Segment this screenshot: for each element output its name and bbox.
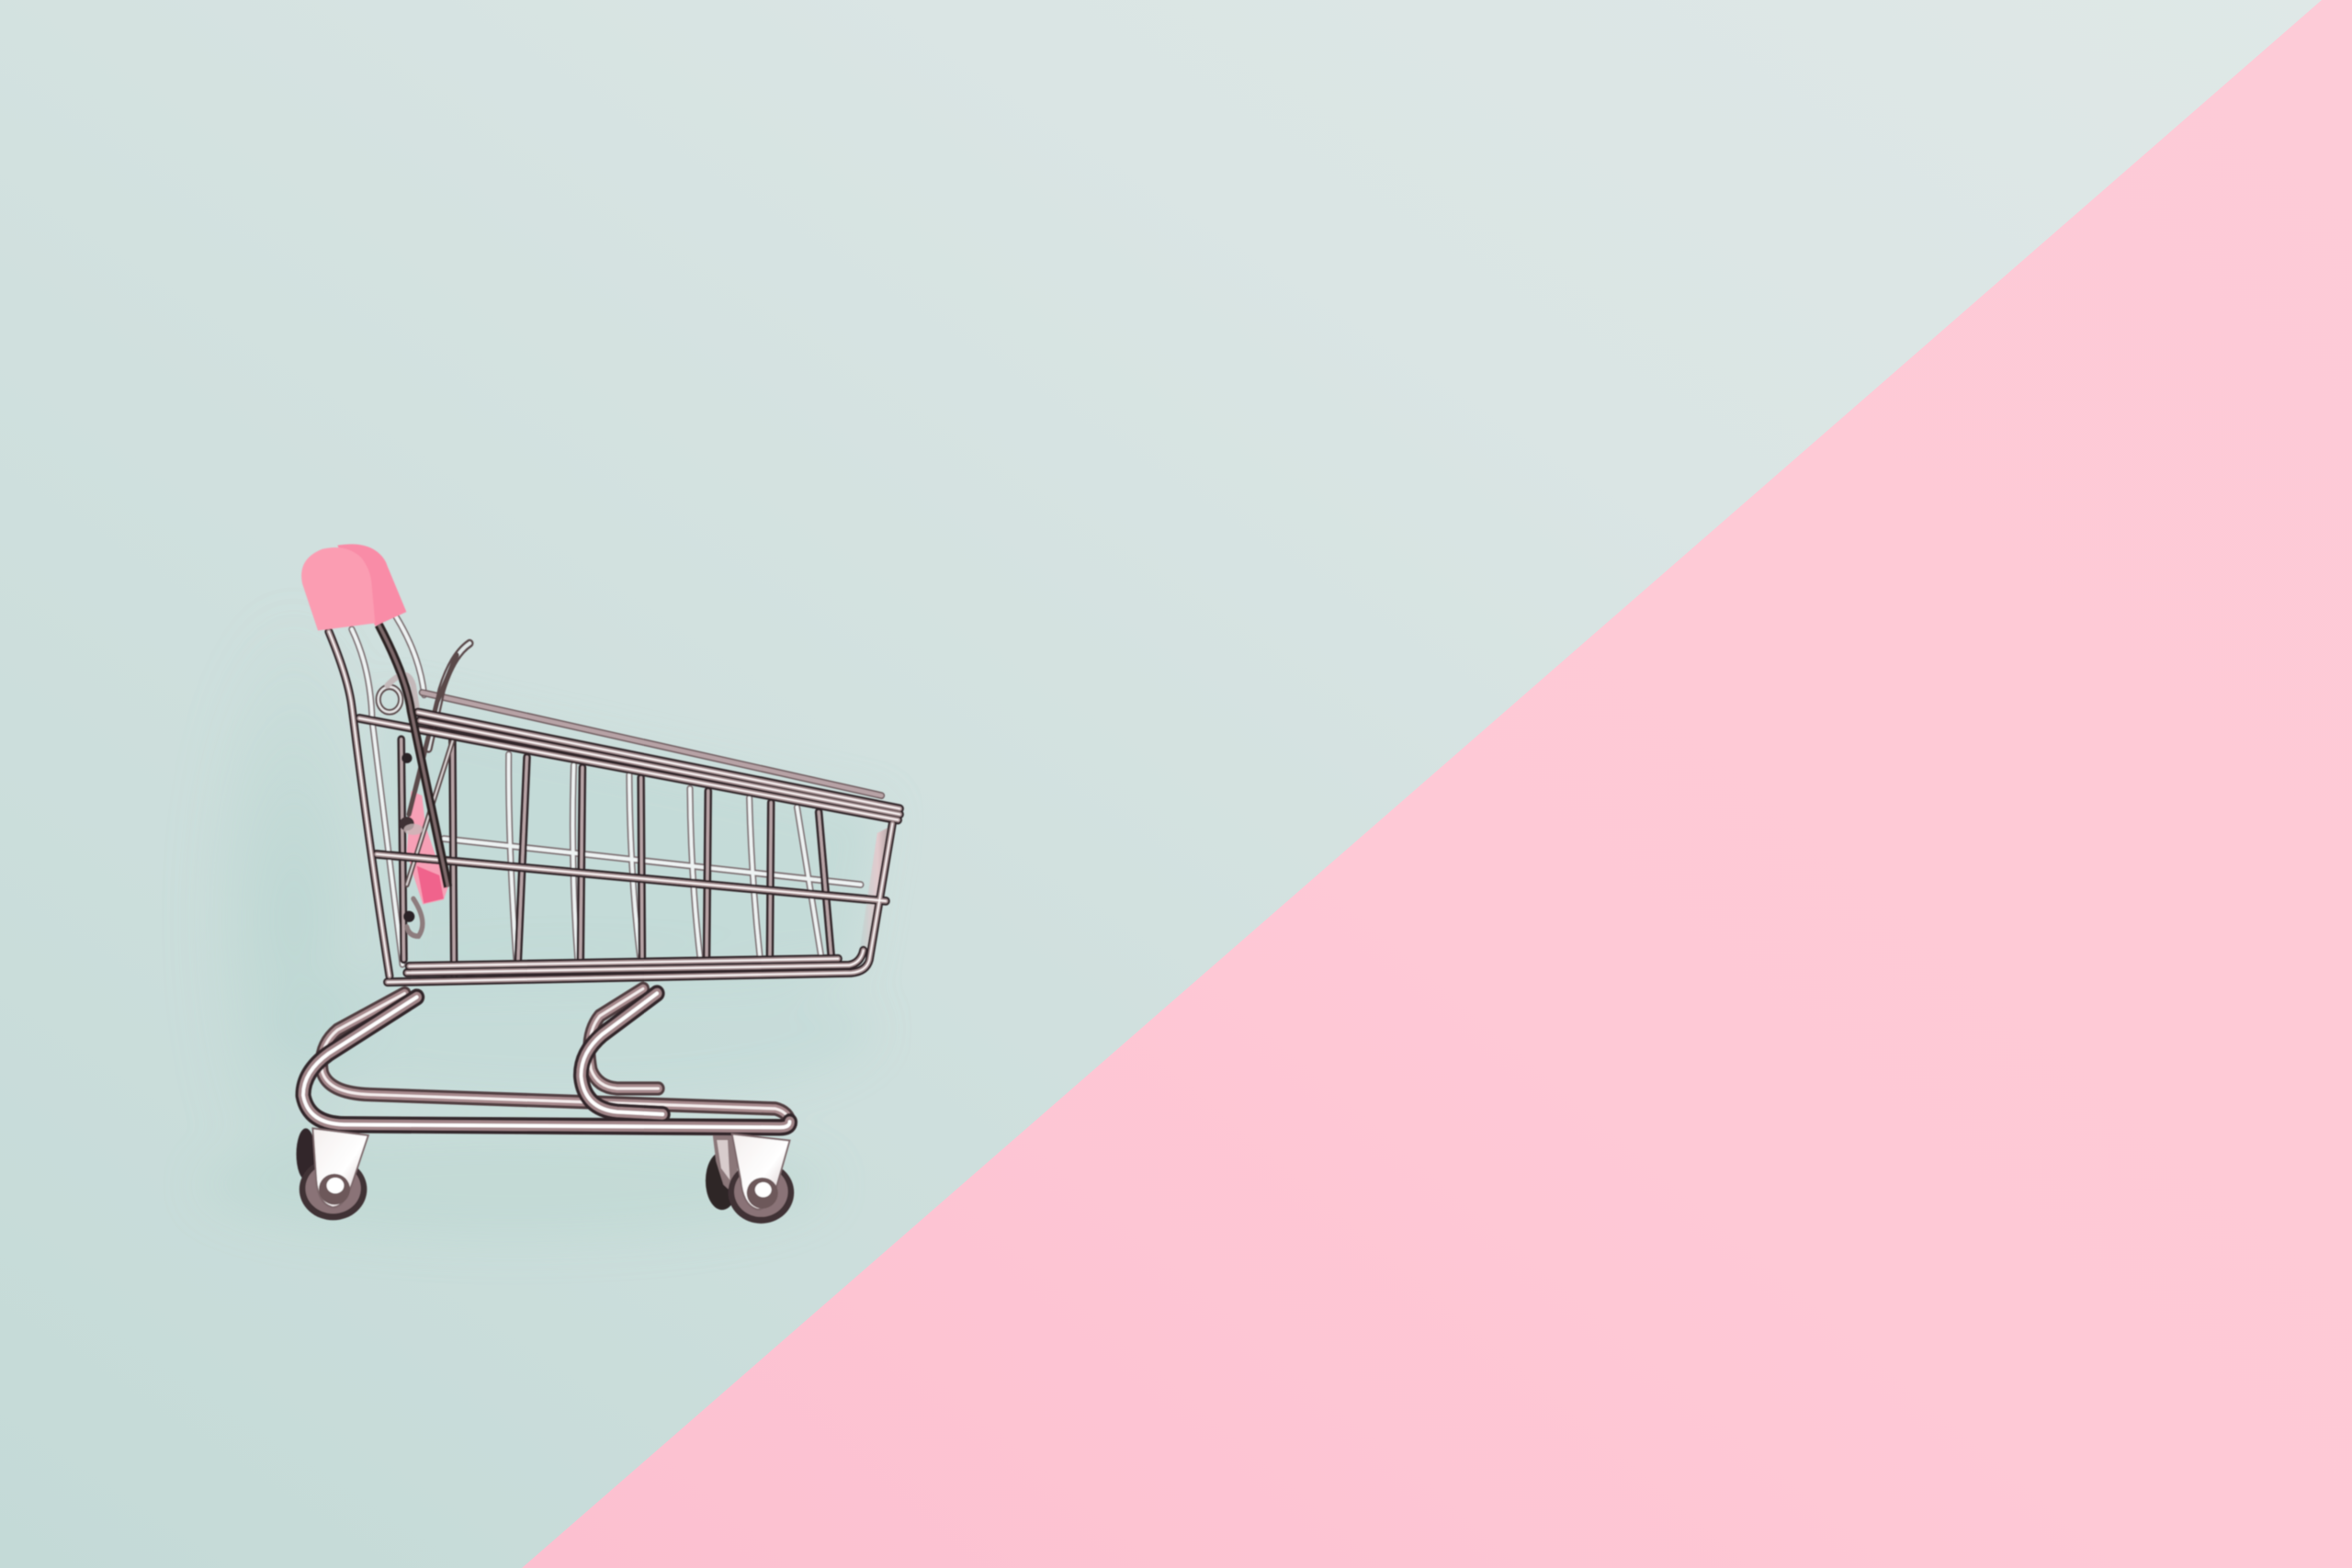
front wires of basket	[401, 735, 832, 976]
front left wheel	[300, 1128, 368, 1220]
front right wheel	[728, 1134, 794, 1224]
cart drop shadow	[193, 606, 882, 1240]
undercarriage front tubes	[303, 993, 789, 1127]
back wires of basket	[352, 615, 861, 976]
rear wheel assemblies	[296, 1128, 739, 1210]
diagonal handle support	[379, 625, 448, 887]
pink child seat flap	[407, 791, 448, 904]
right wall of basket	[858, 826, 891, 962]
back top rail	[422, 693, 882, 795]
basket rails and frame	[329, 632, 899, 982]
background: pink diagonal panel	[522, 0, 2352, 1568]
pink handle grip	[301, 544, 406, 631]
shopping cart	[296, 544, 899, 1224]
rear undercarriage tubes	[322, 988, 790, 1123]
fold-down seat hook and frame	[379, 643, 469, 936]
